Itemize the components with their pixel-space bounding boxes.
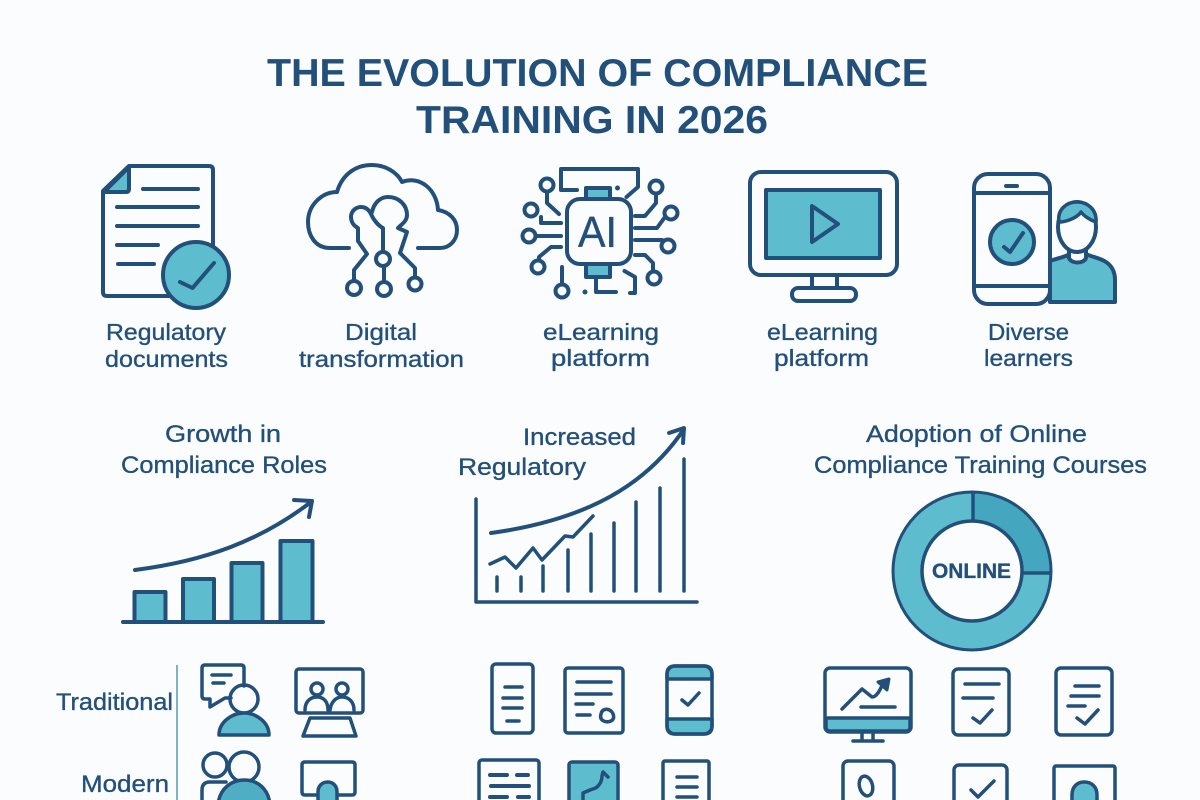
panel: growth in compliance roles <box>121 421 327 622</box>
label <box>299 319 464 372</box>
label: transformation <box>299 346 464 372</box>
heading: Compliance Training Courses <box>814 452 1147 479</box>
bar chart <box>123 541 323 622</box>
label: Diverse <box>988 319 1069 345</box>
label: documents <box>105 346 228 372</box>
panel: diverse learners <box>974 174 1115 371</box>
icon: form document <box>565 668 623 733</box>
icon: report document <box>479 760 539 800</box>
icon: mobile check <box>667 666 712 734</box>
line chart with bars <box>476 459 697 602</box>
icon: AI chip: AI <box>578 208 617 257</box>
label <box>984 319 1073 371</box>
icon: presenter screen <box>302 762 355 800</box>
icon: checklist with lines <box>1056 668 1112 735</box>
donut chart: ONLINE <box>932 560 1011 583</box>
label: platform <box>774 345 869 371</box>
icon: document with blob <box>843 761 894 800</box>
arrow <box>135 500 312 570</box>
title <box>267 52 928 142</box>
icon: phone with check <box>974 174 1050 304</box>
row labels: Traditional <box>56 689 173 716</box>
label <box>767 319 878 371</box>
row labels: Modern <box>81 771 169 798</box>
heading: Regulatory <box>458 454 586 481</box>
icon: checklist <box>953 669 1009 735</box>
title: THE EVOLUTION OF COMPLIANCE <box>267 52 928 95</box>
icon: cloud circuit <box>308 165 457 296</box>
icon: teal profile card <box>1054 766 1115 800</box>
icon: video call <box>296 669 363 736</box>
label: eLearning <box>767 319 878 345</box>
label <box>543 319 659 371</box>
icon: AI chip <box>522 169 678 298</box>
heading: Compliance Roles <box>121 452 327 479</box>
title: TRAINING IN 2026 <box>416 99 768 142</box>
icon: trainer with speech bubble <box>202 665 269 735</box>
panel: eLearning platform video <box>750 172 897 371</box>
panel: regulatory documents <box>103 166 229 372</box>
arrow <box>491 428 684 533</box>
icon: text document <box>663 761 709 800</box>
panel: digital transformation <box>299 165 464 372</box>
label: learners <box>984 345 1073 371</box>
heading <box>458 424 636 481</box>
heading: Increased <box>523 424 636 451</box>
heading <box>121 421 327 479</box>
icon: learner <box>1050 202 1115 302</box>
panel: increased regulatory <box>458 424 697 602</box>
heading <box>814 421 1147 479</box>
label: Regulatory <box>106 319 227 345</box>
icon: monitor with trend <box>825 668 911 741</box>
icon: document with check <box>103 166 229 308</box>
donut chart <box>893 492 1051 650</box>
label <box>105 319 228 372</box>
heading: Adoption of Online <box>866 421 1087 448</box>
panel: eLearning platform AI <box>522 169 678 371</box>
panel: adoption of online training <box>814 421 1147 650</box>
icon: group of learners <box>202 752 270 800</box>
row labels <box>56 665 178 800</box>
label: Digital <box>345 319 417 345</box>
icon: teal route card <box>569 762 618 800</box>
icon: monitor with play button <box>750 172 897 301</box>
icon: check card <box>954 765 1007 800</box>
label: platform <box>551 345 650 371</box>
heading: Growth in <box>165 421 281 448</box>
icon: narrow document <box>492 664 533 733</box>
label: eLearning <box>543 319 659 345</box>
